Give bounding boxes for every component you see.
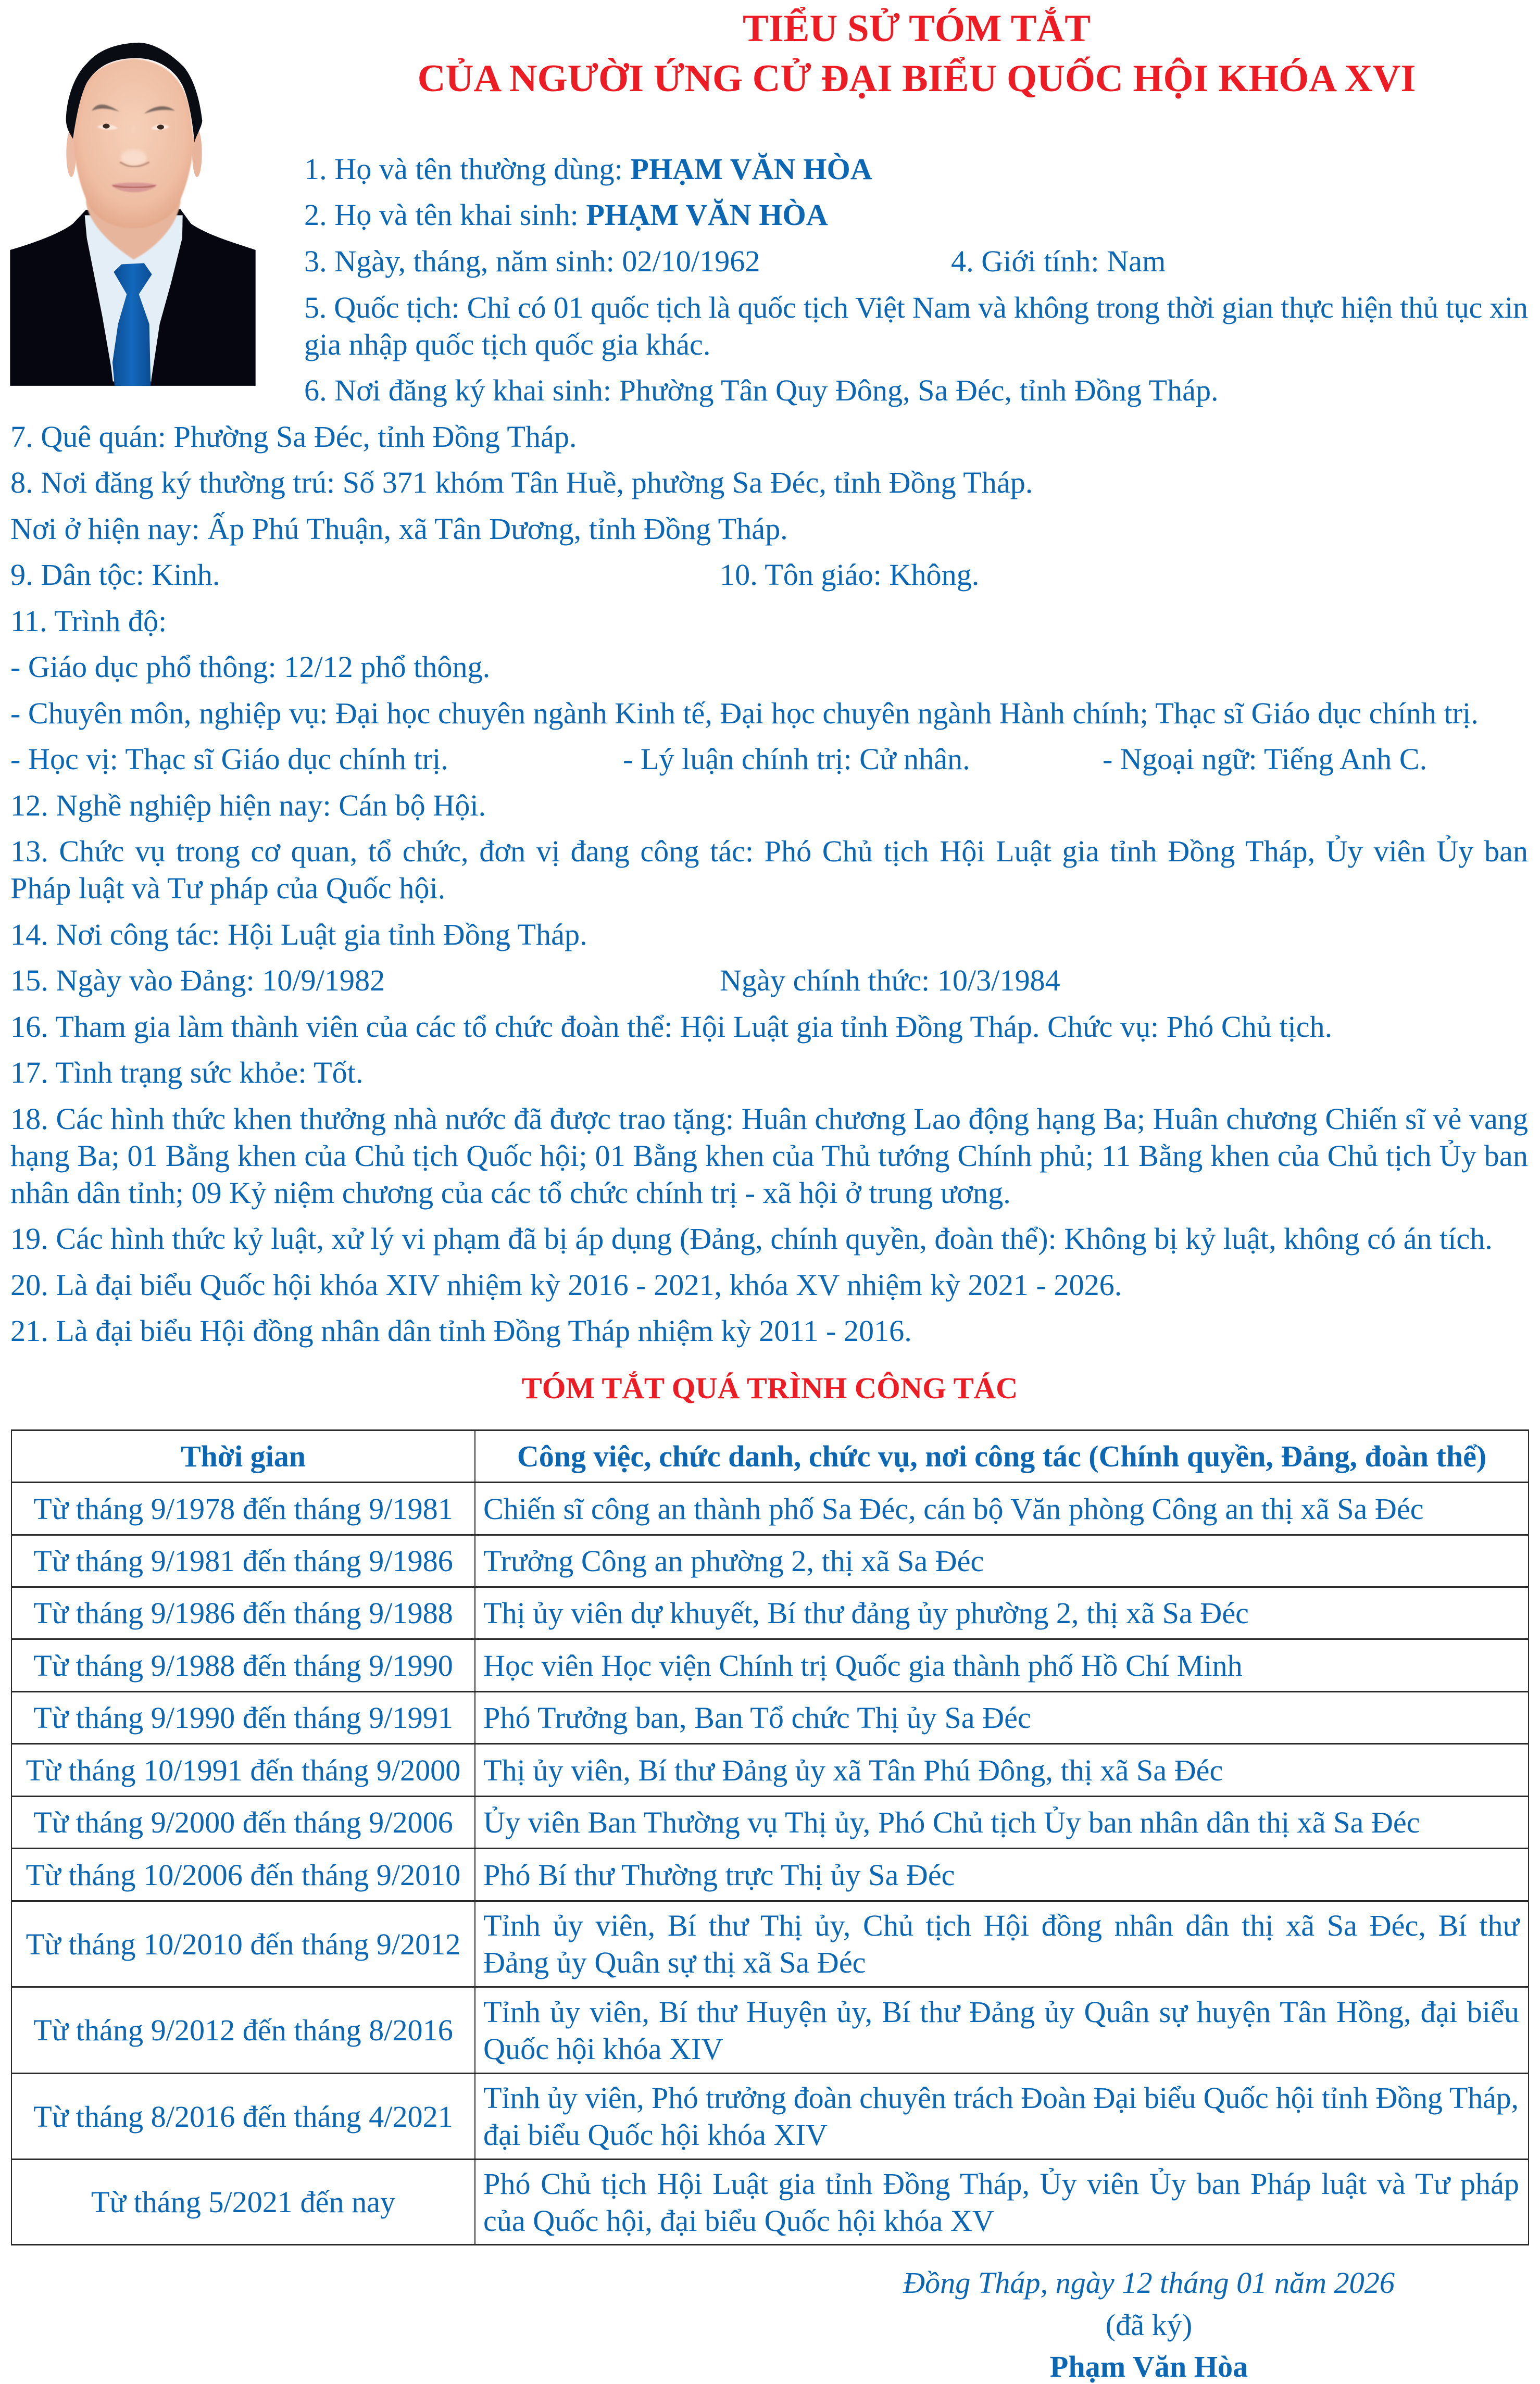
- text: item 13: 13. Chức vụ trong cơ quan, tổ chức, đơn vị đang công tác: Phó Chủ tịch Hội Luật gia tỉnh Đồng Tháp, Ủy viên Ủy ban: [10, 834, 1528, 868]
- row: 1981-1986: Từ tháng 9/1981 đến tháng 9/1986: [33, 1544, 453, 1578]
- text: official date: Ngày chính thức: 10/3/1984: [720, 963, 1060, 997]
- text: general education: - Giáo dục phổ thông: 12/12 phổ thông.: [10, 650, 490, 684]
- row: 2000-2006: Ủy viên Ban Thường vụ Thị ủy, Phó Chủ tịch Ủy ban nhân dân thị xã Sa Đéc: [483, 1805, 1420, 1839]
- text: item 7: 7. Quê quán: Phường Sa Đéc, tỉnh Đồng Tháp.: [10, 420, 577, 454]
- text: item 18: 18. Các hình thức khen thưởng nhà nước đã được trao tặng: Huân chương Lao động hạng Ba; Huân chương Chiến sĩ vẻ vang: [10, 1102, 1528, 1136]
- heading: work history: TÓM TẮT QUÁ TRÌNH CÔNG TÁC: [522, 1371, 1018, 1405]
- row: 2021-present: của Quốc hội, đại biểu Quốc hội khóa XV: [483, 2204, 994, 2237]
- text: item 13: Pháp luật và Tư pháp của Quốc hội.: [10, 871, 445, 905]
- row: 2016-2021: Từ tháng 8/2016 đến tháng 4/2021: [33, 2100, 453, 2133]
- row: 2021-present: [91, 2166, 1519, 2237]
- text: place and date: Đồng Tháp, ngày 12 tháng 01 năm 2026: [903, 2266, 1395, 2300]
- text: item 21: 21. Là đại biểu Hội đồng nhân dân tỉnh Đồng Tháp nhiệm kỳ 2011 - 2016.: [10, 1314, 912, 1348]
- text: item 5: [304, 291, 1528, 361]
- text: item 5: 5. Quốc tịch: Chỉ có 01 quốc tịch là quốc tịch Việt Nam và không trong thời gian thực hiện thủ tục xin: [304, 291, 1528, 324]
- row: 1991-2000: Từ tháng 10/1991 đến tháng 9/2000: [26, 1753, 460, 1787]
- row: 2010-2012: [26, 1909, 1520, 1979]
- row: 1978-1981: [33, 1491, 1424, 1526]
- text: item 18: nhân dân tỉnh; 09 Kỷ niệm chương của các tổ chức chính trị - xã hội ở trung ương.: [10, 1176, 1011, 1210]
- text: item 12: 12. Nghề nghiệp hiện nay: Cán bộ Hội.: [10, 788, 486, 822]
- row: 1981-1986: Trưởng Công an phường 2, thị xã Sa Đéc: [483, 1544, 984, 1578]
- row: 2000-2006: Từ tháng 9/2000 đến tháng 9/2006: [33, 1805, 453, 1839]
- row: 1978-1981: Chiến sĩ công an thành phố Sa Đéc, cán bộ Văn phòng Công an thị xã Sa Đéc: [483, 1491, 1424, 1526]
- row: 2012-2016: Quốc hội khóa XIV: [483, 2032, 723, 2065]
- text: item 20: 20. Là đại biểu Quốc hội khóa XIV nhiệm kỳ 2016 - 2021, khóa XV nhiệm kỳ 2021 - 2026.: [10, 1268, 1122, 1302]
- row: 2006-2010: Từ tháng 10/2006 đến tháng 9/2010: [26, 1858, 460, 1891]
- row: 2021-present: Từ tháng 5/2021 đến nay: [91, 2185, 395, 2219]
- text: item 16: 16. Tham gia làm thành viên của các tổ chức đoàn thể: Hội Luật gia tỉnh Đồng Tháp. Chức vụ: Phó Chủ tịch.: [10, 1010, 1332, 1044]
- portrait photo: [10, 43, 256, 386]
- text: item 17: 17. Tình trạng sức khỏe: Tốt.: [10, 1056, 363, 1089]
- table header row: Thời gian: [181, 1439, 306, 1473]
- text: item 18: hạng Ba; 01 Bằng khen của Chủ tịch Quốc hội; 01 Bằng khen của Thủ tướng Chính phủ; 11 Bằng khen của Chủ tịch Ủy ban: [10, 1139, 1528, 1173]
- panel: personal details: [10, 152, 1528, 1348]
- text: item 2: 2. Họ và tên khai sinh: PHẠM VĂN HÒA: [304, 198, 828, 232]
- title: [418, 7, 1416, 100]
- row: 1990-1991: [33, 1701, 1031, 1735]
- title: TIỂU SỬ TÓM TẮT: [743, 7, 1091, 50]
- row: 1986-1988: Thị ủy viên dự khuyết, Bí thư đảng ủy phường 2, thị xã Sa Đéc: [483, 1596, 1249, 1630]
- row: 2016-2021: Tỉnh ủy viên, Phó trưởng đoàn chuyên trách Đoàn Đại biểu Quốc hội tỉnh Đồng Tháp,: [483, 2081, 1519, 2115]
- table: work history: [11, 1429, 1529, 2245]
- text: item 6: 6. Nơi đăng ký khai sinh: Phường Tân Quy Đông, Sa Đéc, tỉnh Đồng Tháp.: [304, 373, 1219, 407]
- row: 1988-1990: Học viên Học viện Chính trị Quốc gia thành phố Hồ Chí Minh: [483, 1649, 1243, 1682]
- row: 2016-2021: đại biểu Quốc hội khóa XIV: [483, 2118, 828, 2152]
- text: signed note: (đã ký): [1106, 2308, 1192, 2342]
- row: 1990-1991: Phó Trưởng ban, Ban Tổ chức Thị ủy Sa Đéc: [483, 1701, 1031, 1735]
- row: 1991-2000: [26, 1753, 1223, 1787]
- text: item 15: 15. Ngày vào Đảng: 10/9/1982: [10, 963, 385, 997]
- text: item 18: [10, 1102, 1528, 1210]
- text: item 19: 19. Các hình thức kỷ luật, xử lý vi phạm đã bị áp dụng (Đảng, chính quyền, đoàn thể): Không bị kỷ luật, không có án tích.: [10, 1222, 1493, 1256]
- row: 2006-2010: Phó Bí thư Thường trực Thị ủy Sa Đéc: [483, 1858, 955, 1891]
- row: 1988-1990: [33, 1649, 1243, 1682]
- text: item 8: 8. Nơi đăng ký thường trú: Số 371 khóm Tân Huề, phường Sa Đéc, tỉnh Đồng Tháp.: [10, 466, 1033, 499]
- text: item 11: 11. Trình độ:: [10, 604, 167, 638]
- text: item 1: 1. Họ và tên thường dùng: PHẠM VĂN HÒA: [304, 152, 872, 186]
- row: 2010-2012: Từ tháng 10/2010 đến tháng 9/2012: [26, 1927, 460, 1961]
- row: 1990-1991: Từ tháng 9/1990 đến tháng 9/1991: [33, 1701, 453, 1735]
- title: CỦA NGƯỜI ỨNG CỬ ĐẠI BIỂU QUỐC HỘI KHÓA XVI: [418, 57, 1416, 100]
- row: 1981-1986: [33, 1544, 984, 1578]
- text: current residence: Nơi ở hiện nay: Ấp Phú Thuận, xã Tân Dương, tỉnh Đồng Tháp.: [10, 512, 788, 546]
- text: item 13: [10, 834, 1528, 905]
- row: 2012-2016: [33, 1994, 1519, 2065]
- row: 2012-2016: Tỉnh ủy viên, Bí thư Huyện ủy, Bí thư Đảng ủy Quân sự huyện Tân Hồng, đại biểu: [483, 1994, 1519, 2029]
- text: item 14: 14. Nơi công tác: Hội Luật gia tỉnh Đồng Tháp.: [10, 918, 587, 951]
- text: signer name: Phạm Văn Hòa: [1050, 2350, 1248, 2383]
- row: 2006-2010: [26, 1858, 955, 1891]
- row: 2016-2021: [33, 2081, 1519, 2152]
- row: 1986-1988: [33, 1596, 1249, 1630]
- row: 2012-2016: Từ tháng 9/2012 đến tháng 8/2016: [33, 2013, 453, 2047]
- row: 1986-1988: Từ tháng 9/1986 đến tháng 9/1988: [33, 1596, 453, 1630]
- text: professional qualification: - Chuyên môn, nghiệp vụ: Đại học chuyên ngành Kinh tế, Đại học chuyên ngành Hành chính; Thạc sĩ Giáo dục chính trị.: [10, 696, 1479, 730]
- text: item 10: 10. Tôn giáo: Không.: [720, 558, 979, 592]
- signature block: [836, 2264, 1461, 2384]
- row: 1988-1990: Từ tháng 9/1988 đến tháng 9/1990: [33, 1649, 453, 1682]
- text: foreign language: - Ngoại ngữ: Tiếng Anh C.: [1103, 742, 1427, 776]
- row: 2021-present: Phó Chủ tịch Hội Luật gia tỉnh Đồng Tháp, Ủy viên Ủy ban Pháp luật và Tư pháp: [483, 2166, 1519, 2201]
- table header row: Công việc, chức danh, chức vụ, nơi công tác (Chính quyền, Đảng, đoàn thể): [517, 1439, 1486, 1473]
- text: item 5: gia nhập quốc tịch quốc gia khác.: [304, 328, 710, 361]
- row: 2000-2006: [33, 1805, 1420, 1839]
- row: 1991-2000: Thị ủy viên, Bí thư Đảng ủy xã Tân Phú Đông, thị xã Sa Đéc: [483, 1753, 1223, 1787]
- text: item 3: 3. Ngày, tháng, năm sinh: 02/10/1962: [304, 244, 760, 278]
- row: 2010-2012: Tỉnh ủy viên, Bí thư Thị ủy, Chủ tịch Hội đồng nhân dân thị xã Sa Đéc, Bí thư: [483, 1909, 1519, 1942]
- text: item 9: 9. Dân tộc: Kinh.: [10, 558, 220, 592]
- text: political theory: - Lý luận chính trị: Cử nhân.: [623, 742, 970, 776]
- text: academic degree: - Học vị: Thạc sĩ Giáo dục chính trị.: [10, 742, 448, 776]
- text: item 4: 4. Giới tính: Nam: [951, 244, 1166, 278]
- row: 1978-1981: Từ tháng 9/1978 đến tháng 9/1981: [33, 1491, 453, 1526]
- row: 2010-2012: Đảng ủy Quân sự thị xã Sa Đéc: [483, 1946, 866, 1979]
